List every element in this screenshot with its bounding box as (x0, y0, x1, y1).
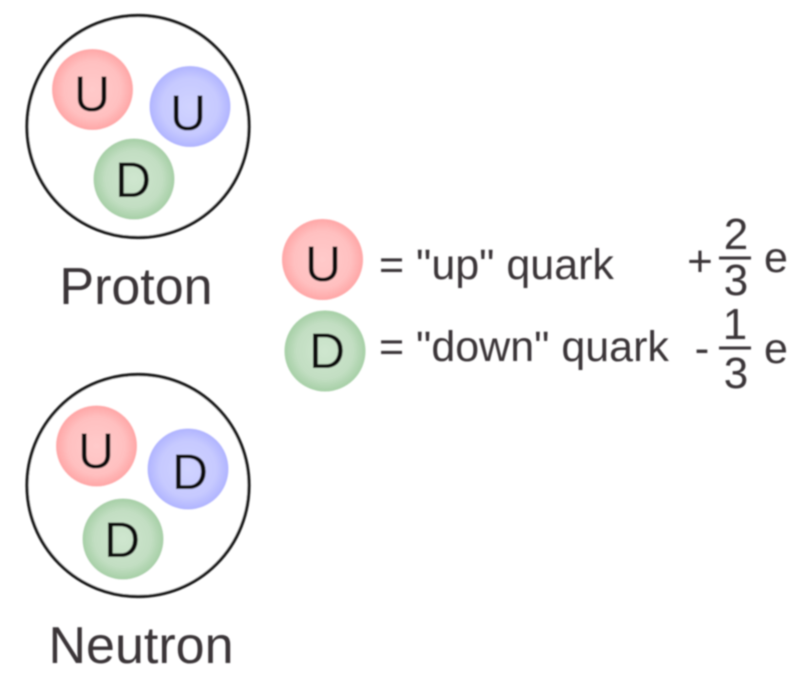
proton outer circle (27, 16, 249, 238)
neutron outer circle (27, 374, 249, 596)
neutron blue down quark (148, 428, 228, 510)
up quark charge: 3 (724, 256, 748, 305)
proton blue up quark (150, 66, 230, 147)
up quark description: = "up" quark (379, 241, 614, 289)
up quark charge: 2 (724, 210, 748, 259)
neutron green down quark: D (104, 512, 140, 568)
down quark charge: - (695, 324, 709, 373)
legend: down quark (284, 300, 788, 398)
proton green down quark (94, 138, 174, 220)
proton red up quark: U (74, 66, 110, 122)
up quark charge: e (764, 234, 788, 282)
neutron blue down quark: D (172, 444, 208, 500)
up quark charge: + (687, 237, 713, 286)
up quark charge (687, 210, 788, 305)
proton green down quark: D (115, 152, 151, 208)
neutron red up quark: U (78, 423, 114, 479)
down quark charge (695, 300, 788, 398)
legend up quark icon: U (305, 236, 341, 292)
proton label: Proton (59, 258, 213, 316)
neutron red up quark (56, 406, 137, 486)
down quark charge: e (764, 325, 788, 373)
legend down quark icon (284, 310, 366, 392)
legend up quark icon (282, 219, 363, 300)
legend: up quark (282, 210, 788, 305)
proton blue up quark: U (170, 85, 206, 141)
down quark charge: 1 (723, 300, 747, 349)
down quark charge: 3 (724, 349, 748, 398)
legend down quark icon: D (309, 323, 345, 379)
proton particle (27, 16, 249, 238)
neutron particle (27, 374, 249, 596)
proton red up quark (52, 49, 133, 130)
down quark description: = "down" quark (379, 323, 669, 371)
neutron green down quark (82, 498, 164, 580)
neutron label: Neutron (48, 617, 234, 675)
